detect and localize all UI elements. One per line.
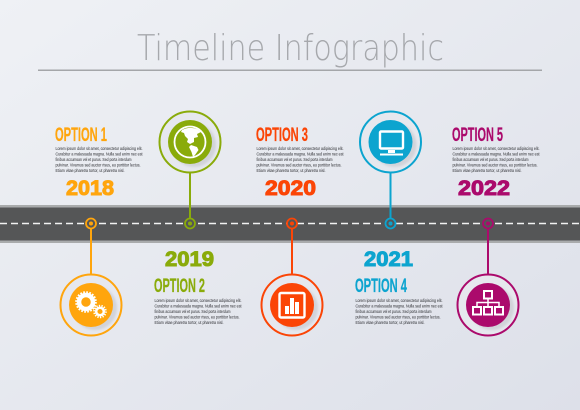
text block: option 2: Lorem ipsum dolor sit amet, consectetur adipiscing elit. (154, 298, 242, 304)
node 2019 (185, 218, 195, 228)
text block: option 5: OPTION 5 (452, 125, 503, 146)
text block: option 5: 2022 (458, 177, 510, 200)
text block: option 1: OPTION 1 (55, 125, 107, 146)
text block: option 5: pulvinar. Vivamus sed auctor risus, eu porttitor lectus. (452, 162, 538, 168)
text block: option 2: finibus accumsan vel et purus. Sed porta interdum (154, 309, 230, 315)
road (0, 205, 580, 243)
milestone 2018 (60, 218, 122, 336)
text block: option 2 (154, 248, 242, 326)
text block: option 2: Etiam vitae pharetra tortor, ut pharetra nisl. (154, 320, 224, 326)
icon: network (458, 274, 518, 336)
text block: option 3: Etiam vitae pharetra tortor, ut pharetra nisl. (256, 168, 326, 174)
icon: monitor (360, 112, 421, 172)
text block: option 4: Lorem ipsum dolor sit amet, consectetur adipiscing elit. (356, 298, 442, 304)
node 2020 (287, 218, 297, 228)
text block: option 5: Lorem ipsum dolor sit amet, consectetur adipiscing elit. (452, 146, 540, 152)
text block: option 4: Etiam vitae pharetra tortor, ut pharetra nisl. (356, 320, 424, 326)
node 2018 (86, 218, 96, 228)
text block: option 2: OPTION 2 (154, 276, 205, 297)
text block: option 3: finibus accumsan vel et purus. Sed porta interdum (256, 157, 332, 163)
text block: option 5 (452, 125, 540, 200)
text block: option 3: 2020 (265, 177, 316, 200)
connector 2018 (90, 223, 92, 274)
connector 2022 (487, 223, 489, 274)
text block: option 5: Etiam vitae pharetra tortor, ut pharetra nisl. (452, 168, 522, 174)
text block: option 4: finibus accumsan vel et purus. Sed porta interdum (356, 309, 432, 315)
text block: option 3: pulvinar. Vivamus sed auctor risus, eu porttitor lectus. (256, 162, 342, 168)
text block: option 4: OPTION 4 (355, 276, 407, 297)
node 2022 (483, 218, 493, 228)
text block: option 1: Curabitur a malesuada magna. Nulla sed enim nec est (56, 152, 143, 158)
text block: option 4: Curabitur a malesuada magna. Nulla sed enim nec est (356, 304, 443, 310)
text block: option 4 (355, 248, 443, 326)
text block: option 3: OPTION 3 (256, 125, 308, 146)
text block: option 1: Etiam vitae pharetra tortor, ut pharetra nisl. (56, 168, 124, 174)
milestone 2019 (160, 112, 220, 228)
text block: option 4: 2021 (364, 248, 413, 271)
text block: option 1: pulvinar. Vivamus sed auctor risus, eu porttitor lectus. (56, 162, 140, 168)
icon: globe (160, 112, 220, 172)
text block: option 3: Curabitur a malesuada magna. Nulla sed enim nec est (256, 152, 344, 158)
text block: option 3: Lorem ipsum dolor sit amet, consectetur adipiscing elit. (256, 146, 344, 152)
node 2021 (386, 218, 396, 228)
text block: option 2: pulvinar. Vivamus sed auctor risus, eu porttitor lectus. (154, 314, 240, 320)
connector 2020 (291, 223, 293, 274)
text block: option 2: Curabitur a malesuada magna. Nulla sed enim nec est (154, 304, 242, 310)
milestone 2021 (360, 112, 421, 228)
title rule (38, 70, 542, 71)
icon: gears (60, 274, 122, 336)
icon: bar chart (262, 274, 322, 336)
milestone 2022 (458, 218, 518, 336)
text block: option 5: finibus accumsan vel et purus. Sed porta interdum (452, 157, 528, 163)
milestone 2020 (262, 218, 322, 336)
text block: option 2: 2019 (165, 248, 214, 271)
text block: option 4: pulvinar. Vivamus sed auctor risus, eu porttitor lectus. (356, 314, 440, 320)
text block: option 5: Curabitur a malesuada magna. Nulla sed enim nec est (452, 152, 540, 158)
text block: option 1: 2018 (66, 177, 114, 200)
connector 2019 (189, 172, 191, 223)
connector 2021 (390, 172, 392, 223)
text block: option 1 (55, 125, 143, 200)
title: Timeline Infographic (137, 28, 444, 69)
text block: option 1: finibus accumsan vel et purus. Sed porta interdum (56, 157, 132, 163)
text block: option 3 (256, 125, 344, 200)
text block: option 1: Lorem ipsum dolor sit amet, consectetur adipiscing elit. (56, 146, 142, 152)
